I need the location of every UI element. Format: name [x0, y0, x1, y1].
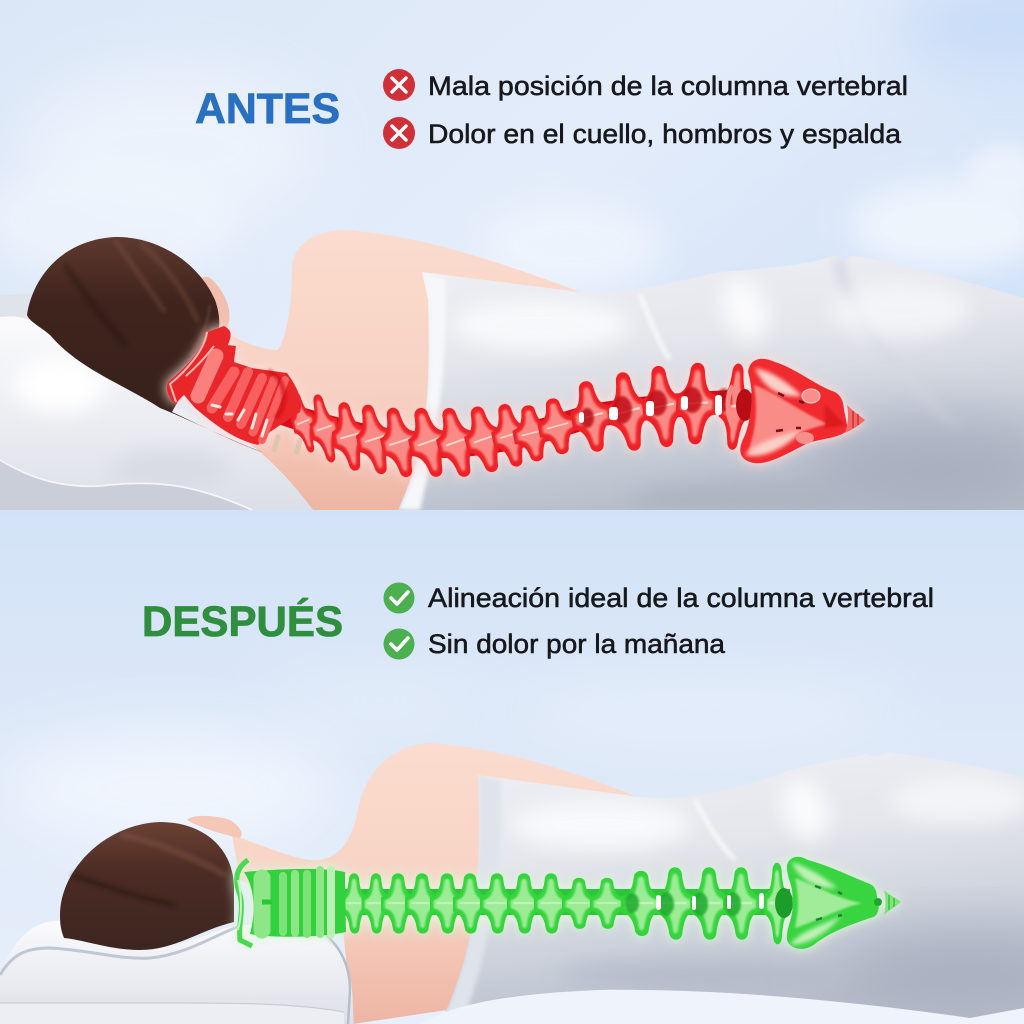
pillow despues: [0, 921, 354, 1024]
skin back despues: [232, 743, 635, 1024]
lower blanket despues: [420, 990, 1024, 1024]
icon: green check 1: [384, 582, 414, 614]
sacrum despues: [787, 857, 901, 949]
vertebral gaps antes: [579, 386, 754, 430]
clouds despues: [0, 675, 900, 850]
sheet despues: [440, 752, 1024, 1024]
ear despues: [187, 816, 242, 838]
list: despues: [384, 582, 934, 660]
text: sin dolor: Sin dolor por la mañana: [428, 629, 726, 659]
sheet antes: [398, 255, 1024, 520]
text: mala posicion: Mala posición de la columna vertebral: [428, 71, 908, 101]
pillow antes: [0, 316, 313, 510]
panel: despues: [0, 664, 1024, 1024]
ear antes: [202, 277, 229, 330]
spine despues (green): [237, 857, 901, 949]
skin back antes: [215, 230, 580, 510]
icon: red cross 2: [383, 117, 415, 149]
clouds antes: [0, 0, 1024, 290]
cervical segment despues: [237, 860, 346, 946]
spine antes (red): [167, 326, 865, 482]
panel: antes: [0, 0, 1024, 520]
icon: green check 2: [384, 628, 414, 660]
hair antes: [27, 237, 262, 452]
hair despues: [60, 822, 234, 950]
icon: red cross 1: [383, 69, 415, 101]
sacrum antes: [740, 359, 865, 463]
pillow back antes: [0, 294, 32, 320]
sky background antes: [0, 0, 902, 471]
heading: despues: DESPUÉS: [142, 598, 343, 646]
vertebrae despues: [340, 863, 790, 944]
vertebral gaps despues: [625, 888, 793, 918]
sky background despues: [0, 743, 1024, 1024]
list: antes: [383, 69, 908, 149]
cervical segment antes: [167, 326, 301, 452]
text: dolor: Dolor en el cuello, hombros y espalda: [428, 119, 902, 149]
heading: antes: ANTES: [195, 85, 340, 133]
vertebrae antes: [280, 362, 755, 482]
text: alineacion: Alineación ideal de la columna vertebral: [428, 583, 934, 613]
